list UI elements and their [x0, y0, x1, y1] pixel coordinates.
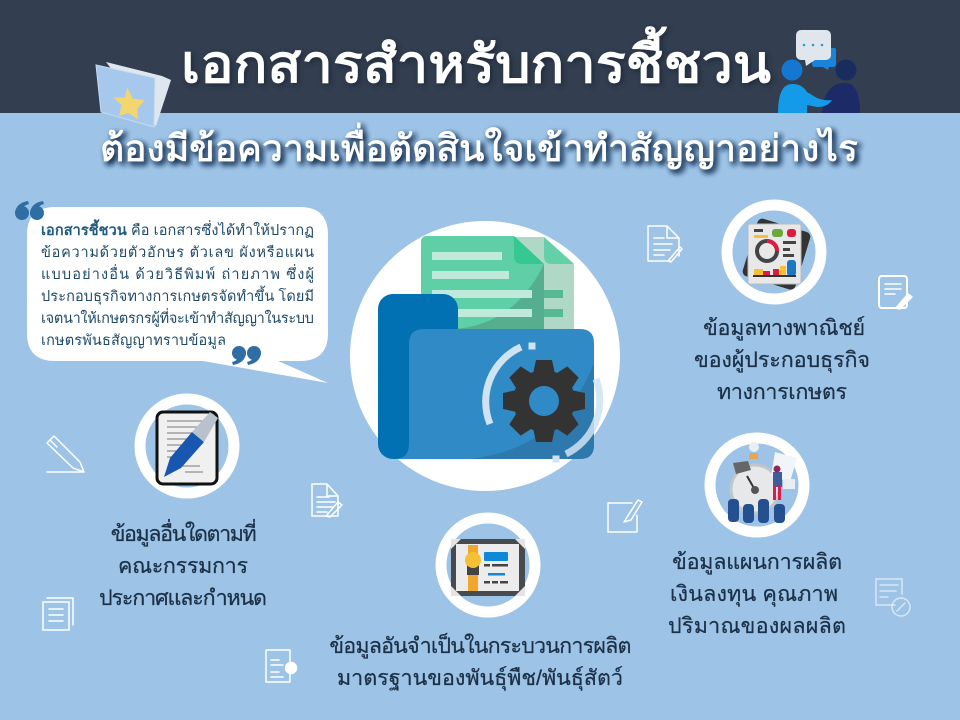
label — [668, 550, 846, 638]
icon: folder with star — [96, 62, 171, 127]
label — [694, 316, 870, 404]
label: ประกาศและกำหนด — [99, 586, 267, 610]
label: ข้อมูลอื่นใดตามที่ — [111, 519, 257, 547]
icon: document with circle — [876, 579, 910, 616]
label: ข้อมูลแผนการผลิต — [672, 550, 842, 575]
folder front — [394, 329, 594, 459]
icon: document with dot — [266, 650, 296, 682]
front document — [421, 236, 544, 329]
label: มาตรฐานของพันธุ์พืช/พันธุ์สัตว์ — [337, 666, 623, 691]
title: เอกสารสำหรับการชี้ชวน — [181, 27, 771, 94]
central circle with folder — [350, 221, 620, 491]
icon: closing quote — [232, 346, 261, 365]
callout text: เกษตรพันธสัญญาทราบข้อมูล — [41, 332, 226, 349]
label: เงินลงทุน คุณภาพ — [670, 582, 838, 607]
label: ข้อมูลทางพาณิชย์ — [703, 316, 865, 341]
callout: definition bubble — [27, 207, 328, 383]
item: production plan — [668, 438, 846, 638]
icon: two people talking — [778, 30, 860, 113]
callout text: แบบอย่างอื่น ด้วยวิธีพิมพ์ ถ่ายภาพ ซึ่งผู้ — [41, 264, 314, 283]
label — [99, 519, 267, 610]
icon: report ring — [727, 205, 821, 299]
subtitle: ต้องมีข้อความเพื่อตัดสินใจเข้าทำสัญญาอย่างไร — [100, 122, 858, 170]
callout text — [41, 219, 314, 349]
icon: pencil on line — [47, 436, 84, 472]
callout text: ประกอบธุรกิจทางการเกษตรจัดทำขึ้น โดยมี — [41, 285, 314, 305]
header band — [0, 0, 960, 113]
item: other information — [99, 399, 267, 610]
label: ทางการเกษตร — [717, 380, 847, 404]
item: commercial information — [694, 205, 870, 404]
icon: document with pen, middle — [312, 484, 342, 517]
callout text: ข้อความด้วยตัวอักษร ตัวเลข ผังหรือแผน — [41, 244, 314, 261]
icon: clock and coins ring — [710, 438, 804, 532]
icon: stacked documents — [43, 598, 73, 630]
icon: document and pen ring — [140, 399, 234, 493]
callout text: เอกสารชี้ชวน คือ เอกสารซึ่งได้ทำให้ปรากฏ — [41, 219, 314, 239]
label: ข้อมูลอันจำเป็นในกระบวนการผลิต — [329, 631, 631, 659]
gear icon — [503, 360, 585, 442]
icon: square with pencil — [608, 500, 642, 532]
icon: document with pen, top — [648, 226, 682, 262]
label: ของผู้ประกอบธุรกิจ — [694, 348, 870, 373]
item: necessary production information — [329, 518, 631, 691]
back document — [450, 237, 574, 329]
icon: note with pencil, right — [879, 276, 912, 309]
callout text: เจตนาให้เกษตรกรผู้ที่จะเข้าทำสัญญาในระบบ — [41, 308, 314, 327]
icon: certificate ring — [441, 518, 535, 612]
label — [329, 631, 631, 691]
folder back — [378, 294, 458, 459]
label: คณะกรรมการ — [118, 554, 248, 578]
label: ปริมาณของผลผลิต — [668, 614, 846, 638]
icon: opening quote — [15, 201, 44, 220]
gear arcs — [486, 343, 600, 462]
